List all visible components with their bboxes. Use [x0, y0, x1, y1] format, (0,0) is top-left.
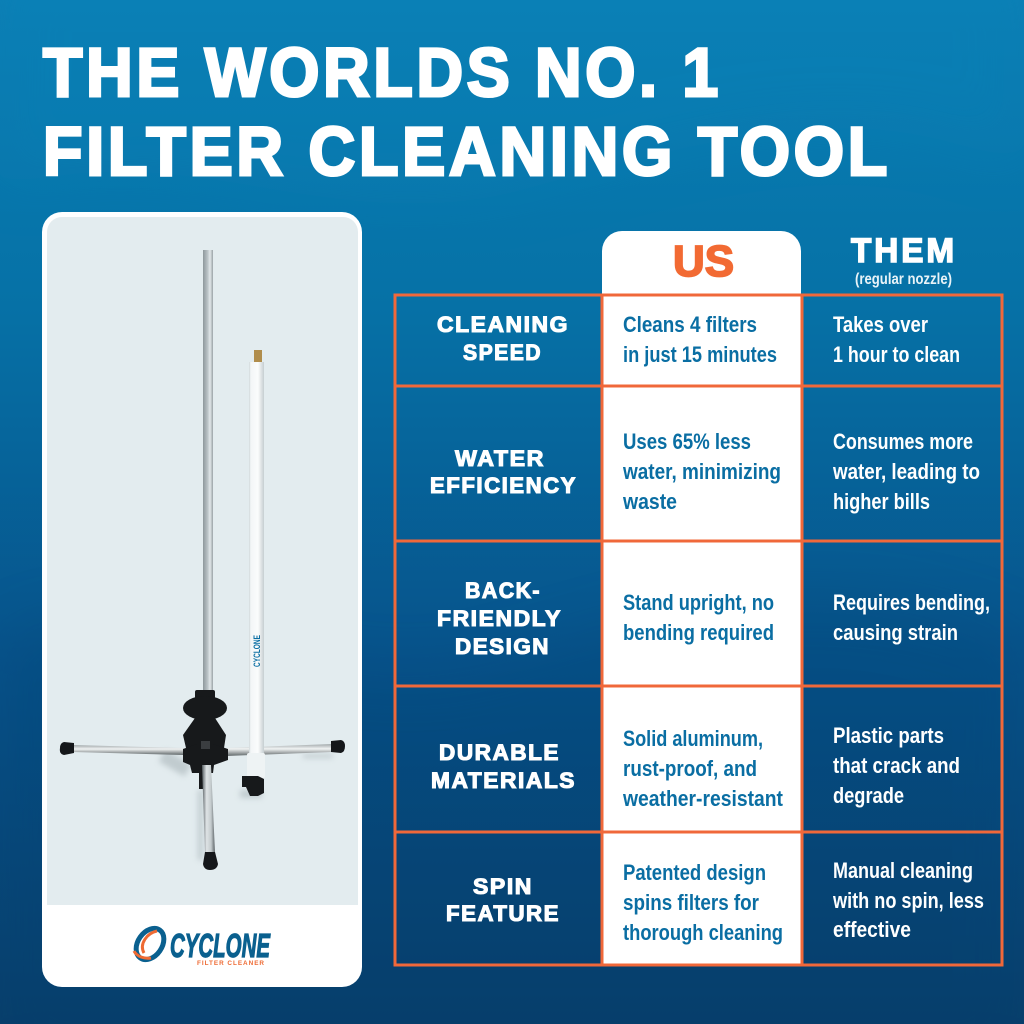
row: water efficiency: WATER	[455, 446, 545, 471]
heading: THEM: (regular nozzle)	[855, 271, 952, 288]
row: back-friendly design	[437, 578, 990, 659]
row: cleaning speed: CLEANING	[437, 312, 569, 337]
row: cleaning speed: Cleans 4 filters	[623, 312, 757, 337]
row: cleaning speed: in just 15 minutes	[623, 342, 777, 367]
title	[43, 34, 891, 190]
panel: product card	[42, 212, 362, 987]
row: back-friendly design: bending required	[623, 620, 774, 645]
row: cleaning speed: 1 hour to clean	[833, 342, 960, 367]
row: spin feature: spins filters for	[623, 890, 759, 915]
heading: THEM: THEM	[851, 232, 957, 270]
row: durable materials: rust-proof, and	[623, 756, 757, 781]
row: water efficiency: water, leading to	[832, 459, 980, 484]
row: durable materials: MATERIALS	[431, 768, 576, 793]
row: durable materials	[431, 723, 960, 811]
logo: Cyclone filter cleaner: CYCLONE	[170, 927, 271, 964]
row: durable materials: DURABLE	[439, 740, 560, 765]
row: spin feature: with no spin, less	[832, 888, 984, 913]
panel: US column	[602, 231, 801, 965]
row: water efficiency: water, minimizing	[622, 459, 781, 484]
row: spin feature: thorough cleaning	[623, 920, 783, 945]
row: back-friendly design: Requires bending,	[833, 590, 990, 615]
logo: Cyclone filter cleaner: FILTER CLEANER	[197, 960, 265, 967]
row: water efficiency: higher bills	[833, 489, 930, 514]
row: durable materials: degrade	[833, 783, 904, 808]
title: THE WORLDS NO. 1	[43, 34, 722, 111]
row: durable materials: that crack and	[833, 753, 960, 778]
tube logo text: CYCLONE	[252, 635, 262, 667]
product photo backdrop	[47, 217, 358, 905]
row: cleaning speed: SPEED	[463, 340, 542, 365]
row: durable materials: weather-resistant	[622, 786, 784, 811]
row: back-friendly design: FRIENDLY	[437, 606, 562, 631]
row: water efficiency	[430, 429, 980, 514]
row: back-friendly design: DESIGN	[455, 634, 550, 659]
row: water efficiency: EFFICIENCY	[430, 473, 577, 498]
row: back-friendly design: causing strain	[833, 620, 958, 645]
product: cleaning tool	[60, 250, 345, 870]
row: spin feature	[446, 858, 984, 945]
heading: THEM	[851, 232, 957, 288]
hub	[183, 690, 228, 789]
row: spin feature: Patented design	[623, 860, 766, 885]
row: spin feature: effective	[833, 917, 911, 942]
row: water efficiency: waste	[622, 489, 677, 514]
row: water efficiency: Uses 65% less	[623, 429, 751, 454]
row: durable materials: Solid aluminum,	[623, 726, 763, 751]
row: back-friendly design: Stand upright, no	[623, 590, 774, 615]
title: FILTER CLEANING TOOL	[43, 113, 891, 190]
row: cleaning speed	[437, 312, 960, 367]
row: spin feature: Manual cleaning	[833, 858, 973, 883]
row: water efficiency: Consumes more	[833, 429, 973, 454]
row: spin feature: SPIN	[473, 874, 533, 899]
row: spin feature: FEATURE	[446, 901, 560, 926]
row: durable materials: Plastic parts	[833, 723, 944, 748]
row: cleaning speed: Takes over	[833, 312, 928, 337]
logo: Cyclone filter cleaner	[130, 923, 271, 967]
heading: US: US	[673, 237, 734, 286]
row: back-friendly design: BACK-	[465, 578, 541, 603]
comparison table grid	[395, 295, 1002, 965]
